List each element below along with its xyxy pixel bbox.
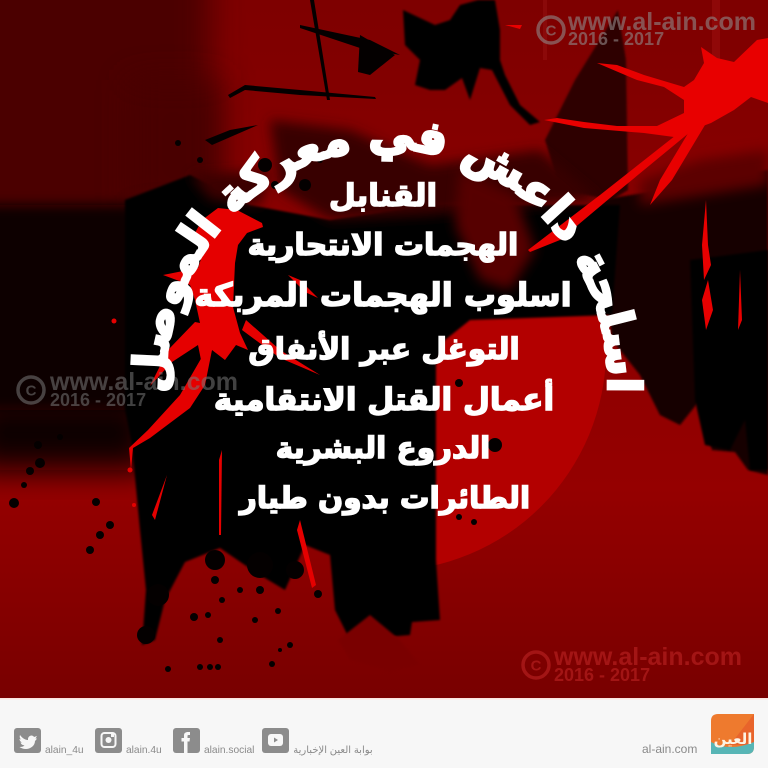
item 2: الهجمات الانتحارية [248,228,518,263]
watermark: top right: 2016 - 2017 [568,29,664,49]
watermark: top right: C [546,22,557,40]
item 6: الدروع البشرية [276,431,490,465]
watermark: bottom right [523,643,742,685]
icon: facebook [173,728,200,753]
footer bar [0,698,768,768]
website label: al-ain.com [642,742,697,756]
icon: instagram [95,728,122,753]
bright red splatter: left [112,208,320,588]
logo: العين [714,730,752,748]
watermark: bottom right: C [531,658,542,674]
watermark: left: 2016 - 2017 [50,390,146,410]
item 4: التوغل عبر الأنفاق [248,331,520,366]
item 5: أعمال القتل الانتقامية [214,379,554,418]
icon: youtube [262,728,289,753]
watermark: bottom right: www.al-ain.com [553,643,742,671]
icon: twitter [14,728,41,753]
label: Al-Ain news portal: بوابة العين الإخبارية [293,745,373,756]
label: alain.social: alain.social [204,745,254,756]
watermark: bottom right: 2016 - 2017 [554,665,650,685]
label: alain_4u: alain_4u [45,745,84,756]
watermark: top right: www.al-ain.com [567,8,756,36]
bright red splatter: upper right [505,25,768,330]
watermark: left: www.al-ain.com [49,368,238,396]
left crowd and central figures silhouette [0,120,620,672]
watermark: top right [538,8,756,49]
item 3: اسلوب الهجمات المربكة [194,276,572,314]
right crowd and flag silhouettes [545,10,768,475]
red circle [435,314,606,565]
list of weapons [194,178,572,515]
label: alain.4u: alain.4u [126,745,162,756]
logo [711,714,754,754]
item 1: القنابل [329,178,437,214]
item 7: الطائرات بدون طيار [238,481,530,515]
watermark: left [18,368,238,410]
watermark: left: C [26,382,37,400]
curved title: اسلحة داعش في معركة الموصل [130,124,644,391]
black ink splatter [9,0,540,672]
